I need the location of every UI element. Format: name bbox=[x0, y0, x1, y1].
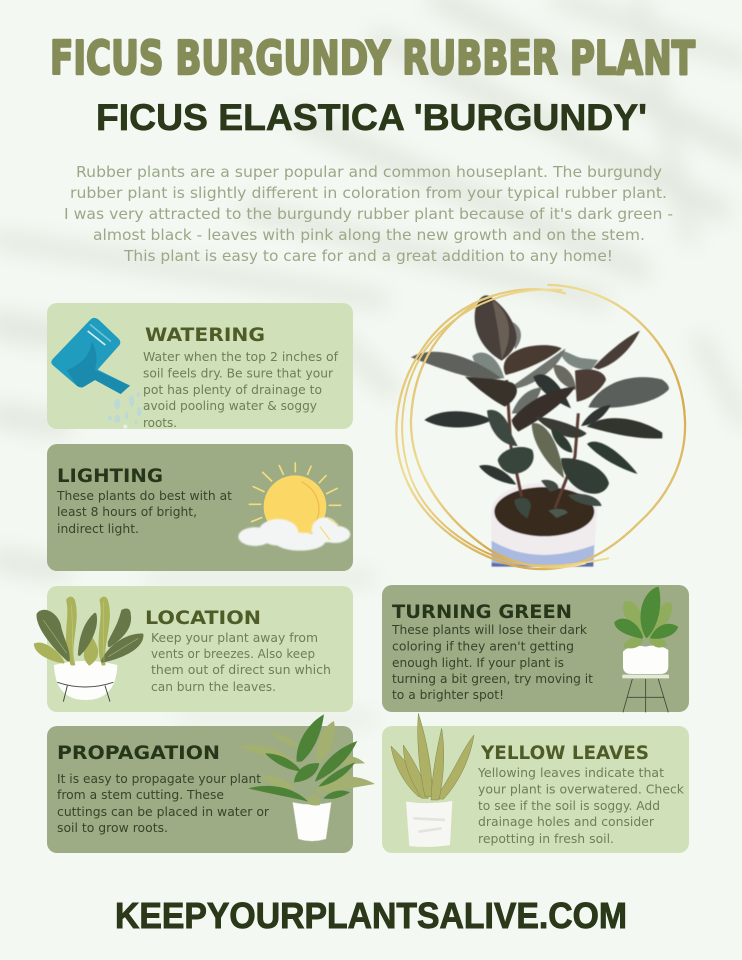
panel: location bbox=[35, 586, 353, 712]
text: location bbox=[151, 631, 331, 694]
text: propagation: It is easy to propagate your plant bbox=[57, 772, 261, 786]
text: lighting: least 8 hours of bright, bbox=[57, 505, 197, 519]
panel: yellow leaves bbox=[382, 713, 689, 853]
icon: plant on stand bbox=[616, 588, 677, 712]
text: turning green: These plants will lose their dark bbox=[391, 623, 587, 637]
text: turning green: turning a bit green, try moving it bbox=[392, 672, 593, 686]
icon: leafy plant in white pot bbox=[238, 714, 375, 841]
text: yellow leaves: repotting in fresh soil. bbox=[478, 832, 614, 846]
icon: sun and cloud bbox=[238, 463, 350, 551]
text: watering: avoid pooling water & soggy bbox=[143, 399, 317, 413]
heading: lighting: LIGHTING bbox=[57, 465, 163, 487]
intro paragraph: Rubber plants are a super popular and common houseplant. The burgundy bbox=[76, 163, 662, 181]
text: yellow leaves: drainage holes and consider bbox=[478, 815, 654, 829]
text: turning green: enough light. If your plant is bbox=[392, 656, 564, 670]
text: propagation: soil to grow roots. bbox=[57, 821, 168, 835]
text: turning green: to a brighter spot! bbox=[392, 688, 504, 702]
text: yellow leaves: Yellowing leaves indicate that bbox=[477, 766, 664, 780]
heading: turning green: TURNING GREEN bbox=[392, 601, 572, 623]
intro paragraph bbox=[64, 163, 673, 265]
icon: potted plant on legs bbox=[35, 598, 142, 702]
text: watering: roots. bbox=[143, 416, 177, 430]
icon: watering can bbox=[51, 318, 142, 429]
text: propagation: cuttings can be placed in water or bbox=[57, 805, 269, 819]
intro paragraph: almost black - leaves with pink along the new growth and on the stem. bbox=[93, 226, 645, 244]
footer url: KEEPYOURPLANTSALIVE.COM bbox=[115, 895, 627, 936]
text: watering: soil feels dry. Be sure that your bbox=[143, 366, 333, 380]
text: propagation: from a stem cutting. These bbox=[57, 788, 224, 802]
text: yellow leaves: to see if the soil is soggy. Add bbox=[478, 799, 660, 813]
intro paragraph: This plant is easy to care for and a great addition to any home! bbox=[123, 247, 613, 265]
text: watering: pot has plenty of drainage to bbox=[143, 383, 322, 397]
text: yellow leaves: your plant is overwatered. Check bbox=[478, 782, 684, 796]
text: location: vents or breezes. Also keep bbox=[151, 647, 315, 661]
heading: watering: WATERING bbox=[145, 324, 265, 346]
heading: propagation: PROPAGATION bbox=[57, 742, 220, 764]
pot bbox=[491, 483, 597, 567]
text: turning green bbox=[391, 623, 593, 702]
panel: propagation bbox=[47, 714, 375, 853]
panel: lighting bbox=[47, 444, 353, 571]
icon: succulent in white pot bbox=[391, 713, 474, 847]
intro paragraph: rubber plant is slightly different in coloration from your typical rubber plant. bbox=[70, 184, 667, 202]
stems and leaves bbox=[411, 295, 669, 519]
rubber plant photo with gold ring bbox=[396, 285, 685, 569]
text: lighting: These plants do best with at bbox=[56, 489, 232, 503]
text: propagation bbox=[57, 772, 269, 835]
text: turning green: coloring if they aren't getting bbox=[392, 640, 574, 654]
text: location: them out of direct sun which bbox=[151, 663, 331, 677]
gold ring bbox=[396, 285, 685, 569]
text: watering bbox=[143, 350, 339, 430]
panel: watering bbox=[47, 303, 353, 430]
heading: yellow leaves: YELLOW LEAVES bbox=[480, 742, 649, 764]
text: location: Keep your plant away from bbox=[151, 631, 318, 645]
text: location: can burn the leaves. bbox=[151, 680, 276, 694]
text: yellow leaves bbox=[477, 766, 684, 846]
text: lighting bbox=[56, 489, 232, 536]
panel: turning green bbox=[382, 585, 689, 712]
intro paragraph: I was very attracted to the burgundy rubber plant because of it's dark green - bbox=[64, 205, 673, 223]
heading: location: LOCATION bbox=[145, 607, 261, 629]
subtitle: FICUS ELASTICA 'BURGUNDY' bbox=[96, 97, 647, 138]
text: watering: Water when the top 2 inches of bbox=[143, 350, 339, 364]
text: lighting: indirect light. bbox=[57, 522, 139, 536]
